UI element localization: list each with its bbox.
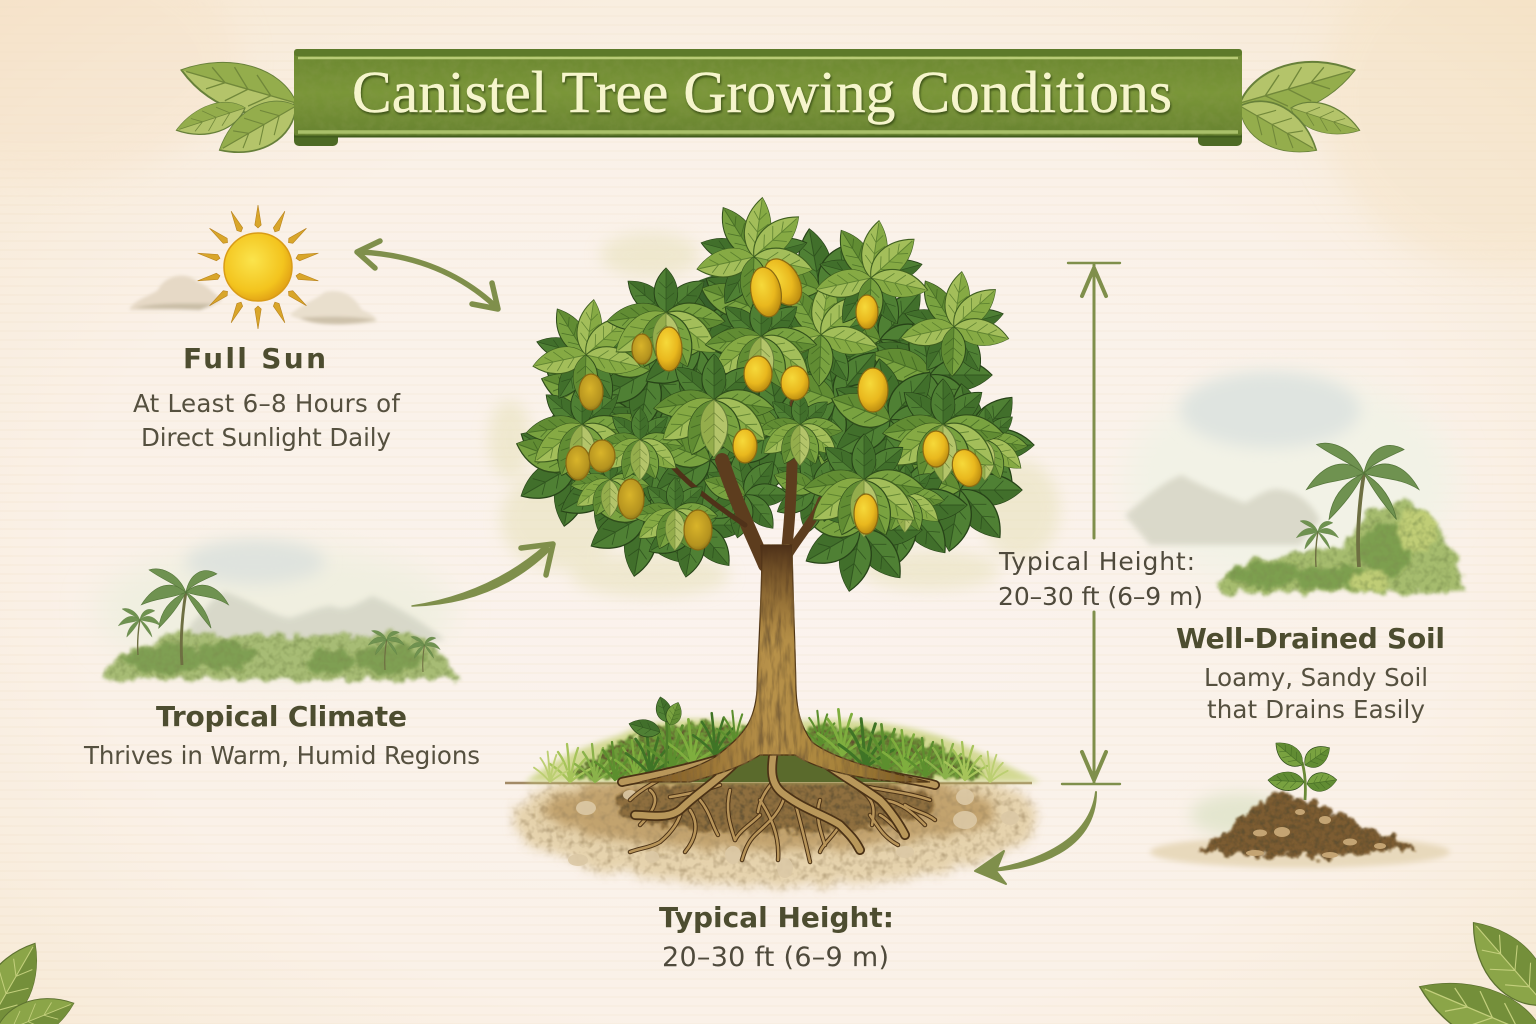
grass <box>525 695 1040 782</box>
trunk and branches <box>640 400 930 782</box>
arrow: climate to tree <box>412 544 553 606</box>
typical height side label <box>998 547 1203 611</box>
fruit <box>566 252 987 550</box>
typical height side label: Typical Height: <box>998 547 1195 576</box>
full sun heading: Full Sun <box>183 342 326 375</box>
height dimension arrow <box>1062 263 1120 784</box>
corner leaves left <box>0 932 81 1024</box>
landscape illustration <box>95 540 465 680</box>
leaf clusters <box>525 196 1029 552</box>
well-drained soil panel <box>1125 372 1465 868</box>
tropical climate panel <box>83 540 480 770</box>
icon: sun <box>197 205 319 329</box>
arrow: sun to tree <box>357 241 498 309</box>
banner right leaves <box>1230 48 1364 167</box>
soil <box>508 783 1042 894</box>
canopy background leaves <box>511 226 1034 594</box>
title: Canistel Tree Growing Conditions <box>352 59 1172 125</box>
tropical climate heading: Tropical Climate <box>156 700 407 733</box>
banner left leaves <box>172 49 306 168</box>
banner ribbon <box>294 49 1242 146</box>
typical height bottom label: Typical Height: <box>659 901 894 934</box>
icon: soil mound with sprout <box>1150 736 1450 868</box>
typical height bottom label: 20–30 ft (6–9 m) <box>662 942 889 973</box>
landscape illustration <box>1125 372 1465 592</box>
well-drained soil heading: Well-Drained Soil <box>1176 622 1445 655</box>
corner leaves right <box>1410 907 1536 1024</box>
well-drained soil text: that Drains Easily <box>1207 695 1425 724</box>
watercolor wash <box>488 233 1060 597</box>
typical height side label: 20–30 ft (6–9 m) <box>998 582 1203 611</box>
full sun text: At Least 6–8 Hours of <box>133 389 401 418</box>
sun panel <box>130 205 401 452</box>
full sun text <box>133 389 401 452</box>
tree illustration <box>488 196 1060 886</box>
typical height bottom label <box>659 901 894 973</box>
tropical climate text: Thrives in Warm, Humid Regions <box>83 741 480 770</box>
icon: clouds <box>130 276 376 324</box>
arrow: height to soil <box>975 792 1096 884</box>
well-drained soil text <box>1204 663 1428 724</box>
roots <box>622 735 935 862</box>
full sun text: Direct Sunlight Daily <box>141 423 391 452</box>
title banner <box>172 48 1364 168</box>
well-drained soil text: Loamy, Sandy Soil <box>1204 663 1428 692</box>
ground line <box>505 782 1032 784</box>
